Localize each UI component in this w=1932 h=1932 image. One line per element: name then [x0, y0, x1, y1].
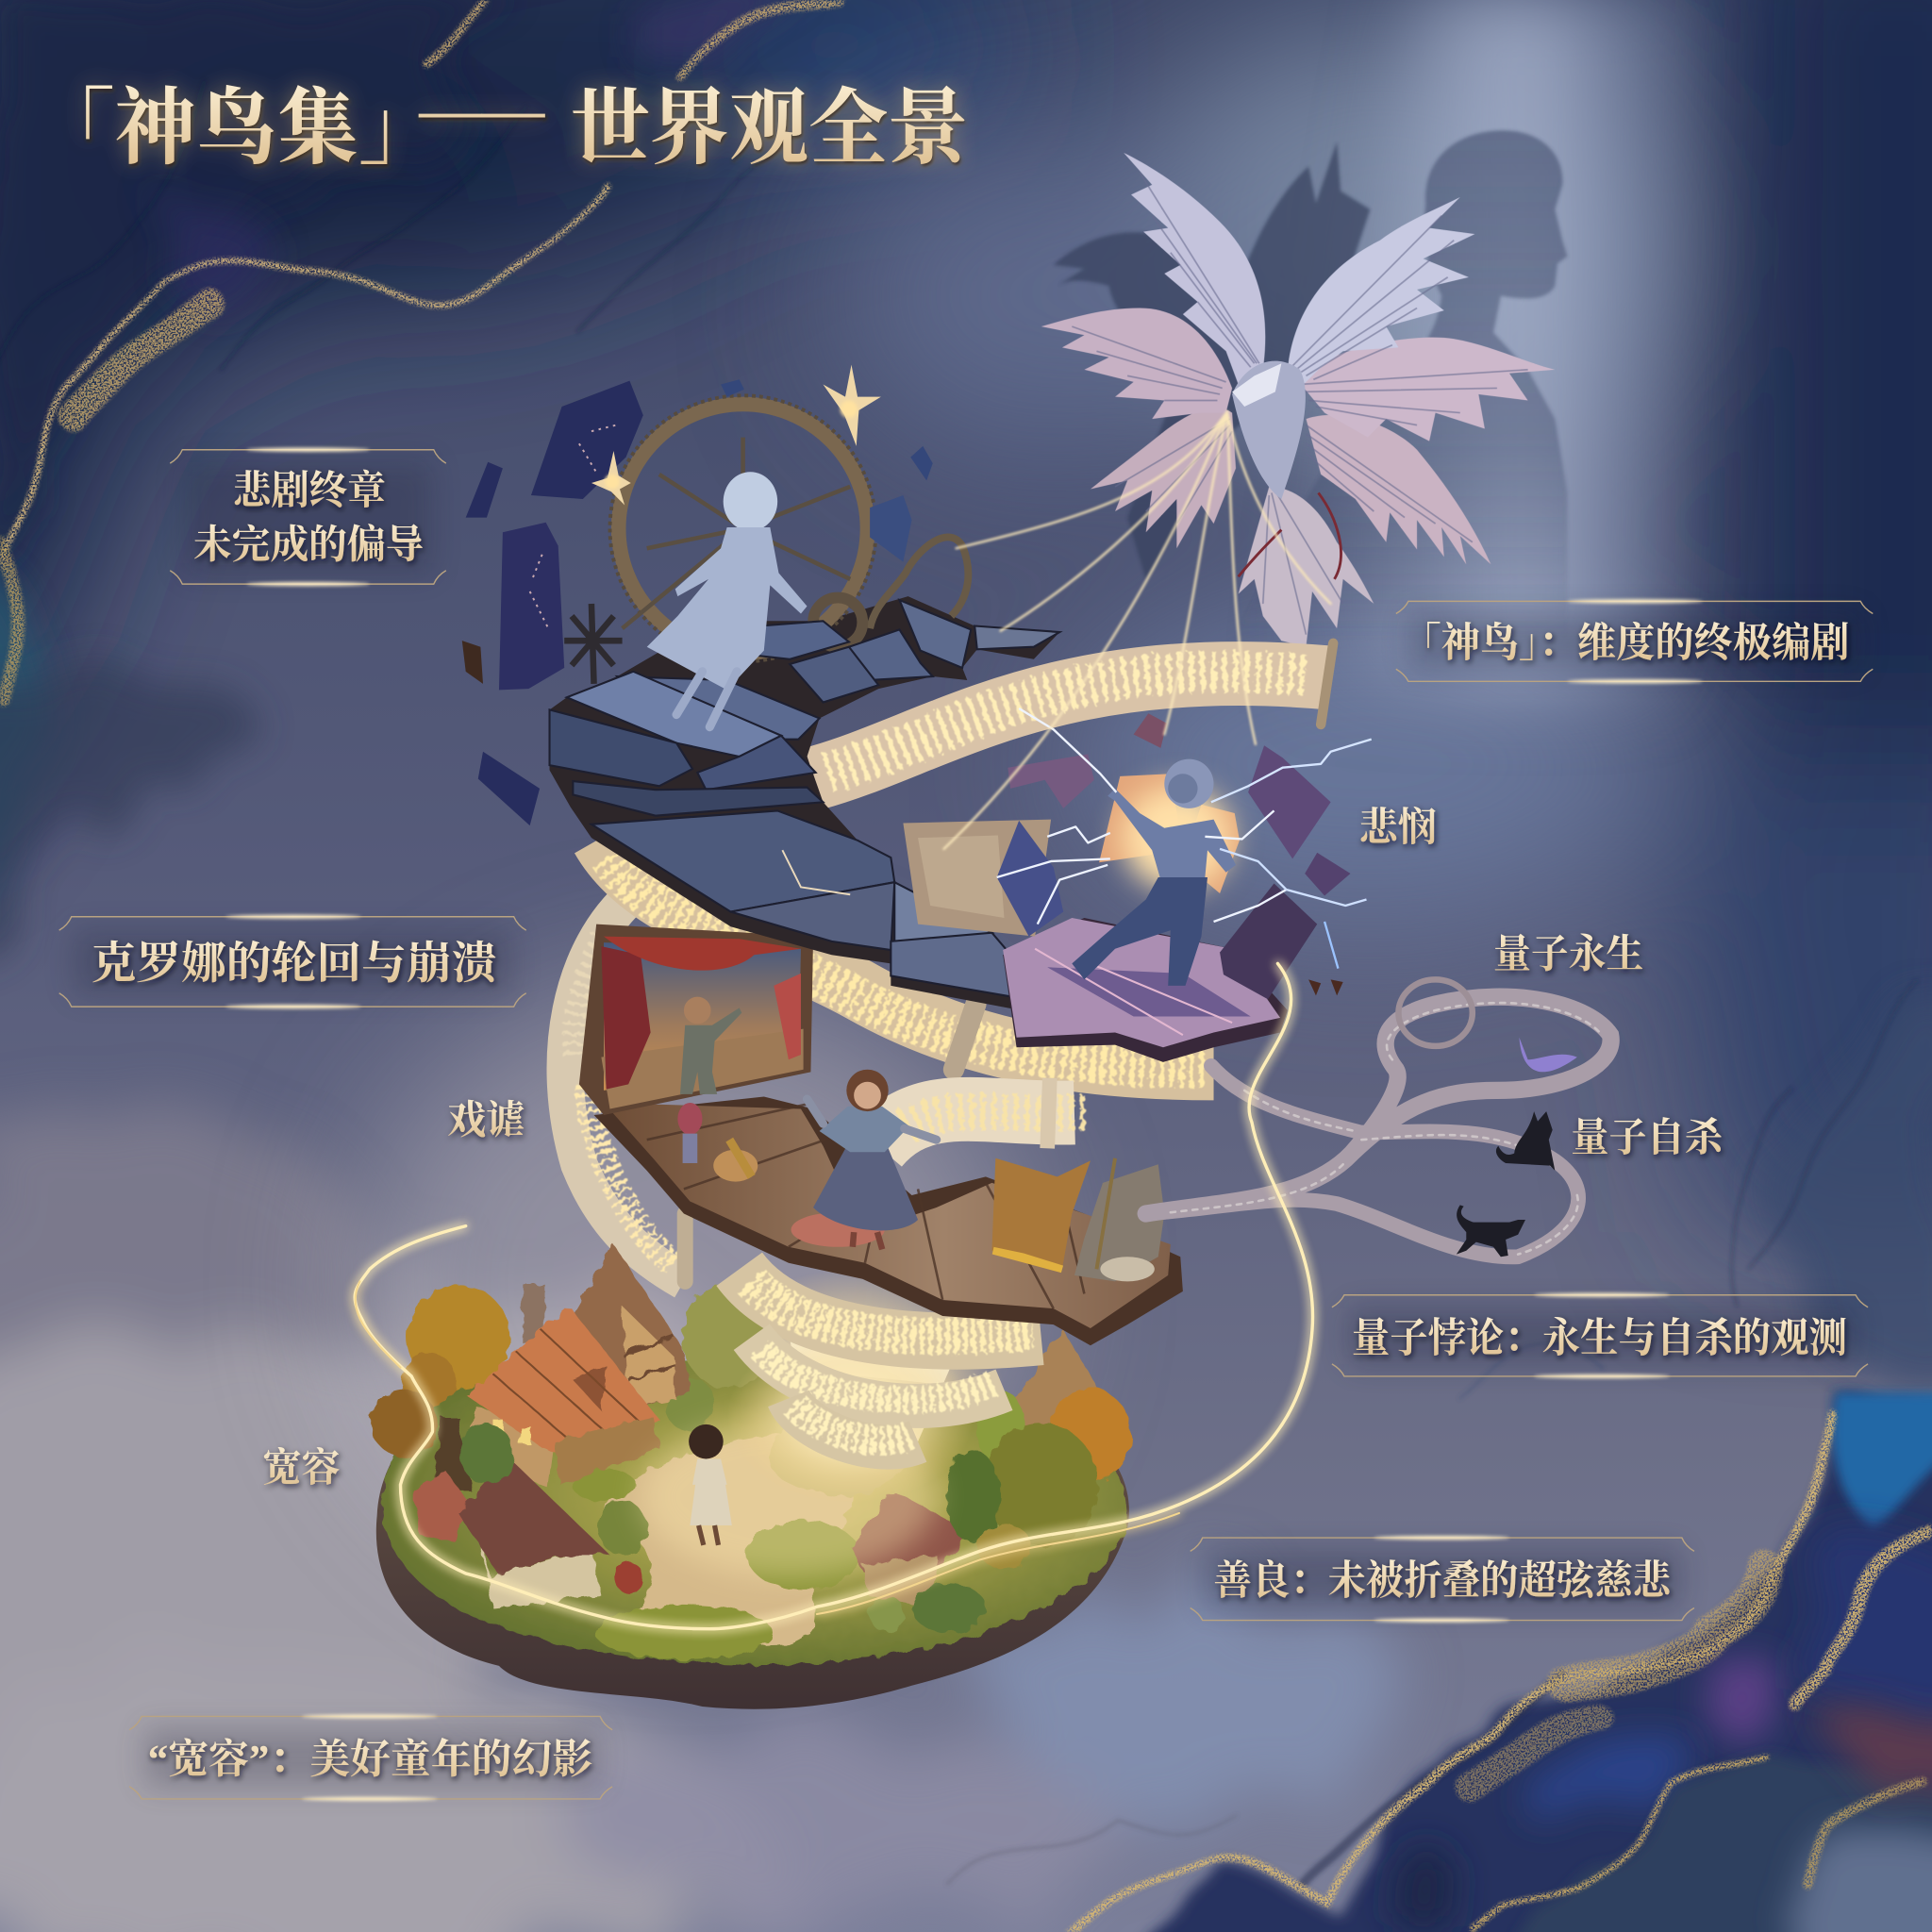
label: quantum immortality: 量子永生 [1493, 932, 1643, 976]
star specks on shards [530, 425, 616, 628]
shards around the boy [997, 713, 1351, 999]
right trees [946, 1389, 1131, 1569]
label: Krona cycle: 克罗娜的轮回与崩溃 [92, 940, 496, 989]
upper right ink wash [1774, 986, 1932, 1392]
back tree [683, 1285, 772, 1389]
light spill on the path [641, 1417, 937, 1577]
small right house [850, 1491, 974, 1607]
warm halo behind spire [358, 986, 1023, 1577]
lightning boy [1072, 759, 1236, 986]
fate strings from the bird [943, 411, 1331, 849]
chimney [523, 1284, 544, 1343]
dirt path [604, 1429, 853, 1647]
main house [466, 1306, 659, 1489]
phoenix: divine bird [1041, 153, 1555, 647]
label: quantum paradox [1332, 1293, 1868, 1378]
right beam and dark side [838, 0, 1932, 1232]
girl facing the light [689, 1424, 732, 1545]
lightning arcs [997, 708, 1372, 969]
lower left wing [1091, 408, 1236, 548]
blue stone platform [462, 365, 1059, 1013]
label: compassion: 悲悯 [1359, 806, 1437, 850]
sparkles [591, 365, 881, 506]
label: Krona cycle [59, 915, 526, 1008]
label: divine bird [1396, 599, 1873, 683]
fog bottom-left [0, 1109, 1417, 1932]
label: kindness: 善良：未被折叠的超弦慈悲 [1214, 1558, 1674, 1604]
stone slabs [550, 600, 1059, 1001]
feather veins [1072, 173, 1528, 635]
stone statue [1074, 1158, 1164, 1281]
ribbon: left spiral arc [565, 893, 684, 1281]
top-left navy ink [0, 0, 1023, 862]
lower right wing [1306, 415, 1491, 564]
label: childhood illusion [129, 1714, 612, 1801]
toy figures [677, 1103, 758, 1182]
purple floor [1003, 918, 1280, 1047]
label: kindness [1191, 1536, 1694, 1623]
platform underside [594, 1096, 1183, 1345]
label: quantum paradox: 量子悖论：永生与自杀的观测 [1352, 1316, 1847, 1361]
stone underside [550, 596, 1059, 1013]
island lawn [382, 1358, 1128, 1665]
title: 「神鸟集」 [33, 83, 440, 175]
golden banner [991, 1158, 1091, 1269]
bird body [1232, 361, 1306, 499]
cat sitting [1496, 1111, 1555, 1171]
purple wisp [1519, 1038, 1577, 1072]
floating island [371, 1244, 1131, 1709]
wooden steps [604, 1103, 1171, 1328]
island rock base [376, 1369, 1129, 1709]
front-left house and shed [414, 1457, 610, 1607]
label: childhood illusion: “宽容”：美好童年的幻影 [148, 1738, 592, 1783]
small green shrubs [459, 1424, 986, 1633]
ribbon: middle scroll [877, 1078, 1084, 1148]
boy actor [680, 997, 741, 1094]
label: tolerance: 宽容 [262, 1446, 340, 1491]
label: tragic finale [170, 448, 446, 586]
broken gear [564, 604, 623, 684]
ribbon: upper scroll [813, 643, 1333, 778]
far right house [1013, 1328, 1099, 1436]
purple shattered platform [903, 708, 1372, 1062]
golden thread of kindness [355, 963, 1313, 1629]
upper left wing [1124, 153, 1265, 385]
astrolabe back ring [610, 395, 968, 661]
title [33, 67, 968, 175]
lower ribbons under the wood stage [685, 1214, 1041, 1503]
red ribbons on tail [1239, 492, 1341, 579]
label: jest: 戏谑 [447, 1099, 525, 1143]
bottom right deep ink [1120, 1392, 1932, 1932]
ring knot [1398, 979, 1473, 1046]
back ribbons of glowing script [565, 643, 1333, 1281]
wood stage platform [579, 924, 1183, 1345]
label: tragic finale: 悲剧终章 [233, 469, 386, 513]
middle left wing [1041, 308, 1232, 419]
grass patches [572, 1377, 860, 1659]
spiral hay mound [769, 1408, 918, 1496]
cliff edge [1003, 918, 1288, 1062]
rear house [560, 1244, 690, 1411]
warm burst panels [1099, 774, 1240, 893]
central glow column [696, 1269, 1004, 1516]
upper right wing [1288, 197, 1474, 388]
phantom crow silhouette [1054, 142, 1370, 579]
golden tree [371, 1285, 510, 1491]
ribbon: under stone platform [601, 838, 1214, 1070]
theatre box [579, 924, 813, 1115]
left lower ink wash [0, 671, 253, 974]
orbiting shards [462, 379, 933, 825]
cat walking [1457, 1205, 1525, 1257]
ghost girl statue [647, 472, 808, 727]
thin quantum ribbons [1146, 979, 1611, 1257]
phantom man silhouette [1232, 130, 1567, 641]
tail feathers [1239, 487, 1374, 647]
title: 世界观全景 [571, 83, 968, 175]
title: —— [418, 67, 545, 149]
small debris [1308, 979, 1343, 995]
label: divine bird: 「神鸟」：维度的终极编剧 [1402, 621, 1849, 666]
middle right wing [1293, 338, 1555, 441]
label: quantum suicide: 量子自杀 [1571, 1116, 1724, 1160]
dancing girl on drum [791, 1070, 937, 1249]
parchment card [903, 820, 1051, 937]
label: tragic finale: 未完成的偏导 [193, 524, 424, 568]
